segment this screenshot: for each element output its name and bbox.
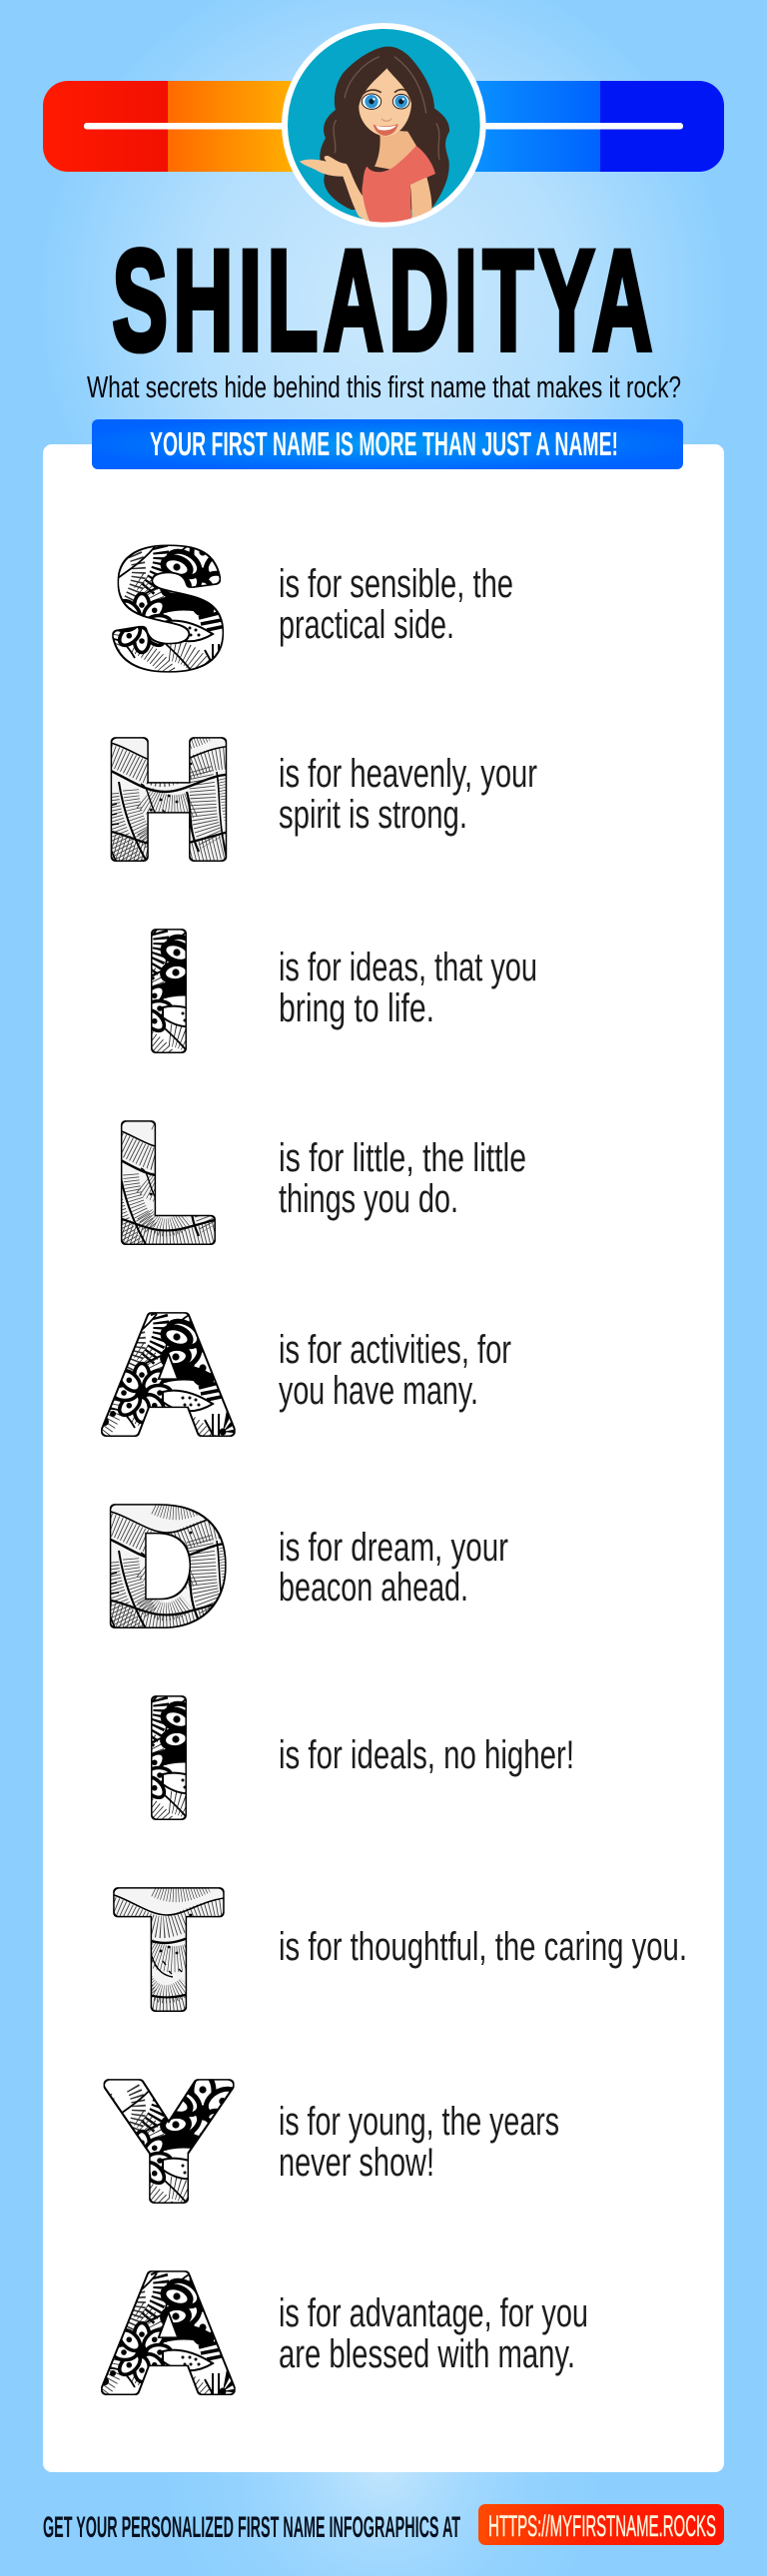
row: L <box>116 1091 526 1274</box>
row: S <box>114 517 513 700</box>
text I: is for ideas, that you <box>279 946 537 989</box>
text S: practical side. <box>279 603 454 647</box>
text A: you have many. <box>279 1369 478 1413</box>
text D <box>279 1526 508 1610</box>
text L: is for little, the little <box>279 1136 526 1180</box>
portrait: cartoon woman in circle <box>285 26 483 225</box>
white content panel <box>43 444 724 2472</box>
letter L: L <box>116 1091 215 1274</box>
text S: is for sensible, the <box>279 562 513 606</box>
hair <box>320 47 449 210</box>
letter I second: I <box>146 1666 192 1849</box>
footer url button <box>478 2504 724 2545</box>
text Y <box>279 2100 559 2185</box>
letter S: S <box>114 517 224 700</box>
text I <box>279 946 537 1030</box>
text A second: are blessed with many. <box>279 2332 575 2376</box>
letter Y: Y <box>107 2050 231 2233</box>
banner <box>92 419 683 469</box>
letter I: I <box>146 900 192 1082</box>
row: A second <box>103 2242 588 2424</box>
neck <box>375 130 417 170</box>
row: H <box>105 708 537 891</box>
text L <box>279 1136 526 1221</box>
text I: bring to life. <box>279 986 434 1030</box>
letter D: D <box>105 1475 228 1657</box>
letter H: H <box>105 708 233 891</box>
text A second <box>279 2291 588 2376</box>
row: T <box>117 1858 687 2041</box>
text H <box>279 752 537 837</box>
eyebrows <box>362 90 408 96</box>
text L: things you do. <box>279 1177 458 1221</box>
text A: is for activities, for <box>279 1328 511 1372</box>
row: I second <box>146 1666 574 1849</box>
nose <box>382 119 391 121</box>
face <box>359 68 411 137</box>
row: D <box>105 1475 508 1657</box>
row: Y <box>107 2050 559 2233</box>
header colour bar <box>43 81 724 172</box>
text H: spirit is strong. <box>279 793 467 837</box>
title: SHILADITYA <box>112 220 652 380</box>
shirt <box>362 146 435 223</box>
text A second: is for advantage, for you <box>279 2291 588 2335</box>
text H: is for heavenly, your <box>279 752 537 796</box>
text I second: is for ideals, no higher! <box>279 1733 574 1777</box>
text Y: is for young, the years <box>279 2100 559 2144</box>
row: I <box>146 900 537 1082</box>
letter T: T <box>117 1858 220 2041</box>
text D: is for dream, your <box>279 1526 508 1570</box>
left arm and hand <box>300 156 371 223</box>
right arm <box>410 177 432 223</box>
text S <box>279 562 513 647</box>
text A <box>279 1328 511 1413</box>
row: A <box>103 1283 511 1466</box>
text D: beacon ahead. <box>279 1566 468 1610</box>
letter A: A <box>103 1283 234 1466</box>
text Y: never show! <box>279 2141 434 2185</box>
eyes <box>362 94 409 109</box>
mouth <box>374 124 398 136</box>
letter A second: A <box>103 2242 234 2424</box>
